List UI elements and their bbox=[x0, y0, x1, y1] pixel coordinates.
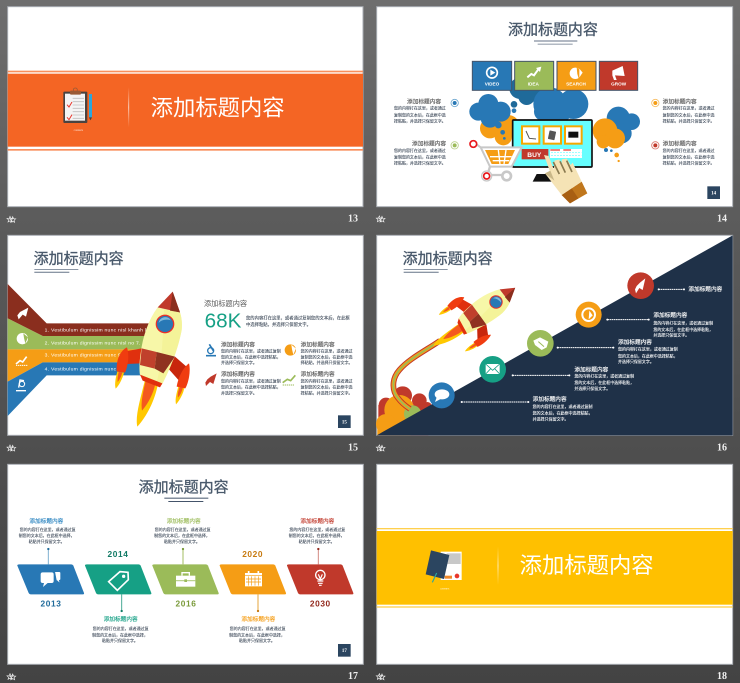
timeline step: 2030 bbox=[287, 564, 353, 608]
text block: 2020 bbox=[229, 615, 286, 643]
text block: step 4: 您的文本后，在此框中选择粘贴， bbox=[653, 326, 713, 332]
timeline step: 2014 bbox=[85, 549, 151, 594]
text block: step 2 bbox=[574, 365, 634, 391]
icon tile: idea: IDEA bbox=[528, 82, 540, 87]
text block: 2020: 您的内容打在这里，或者通过复 bbox=[230, 625, 286, 631]
page number box: 17 bbox=[342, 649, 347, 654]
text block: item 1: 您的内容打在这里，或者通过复制 bbox=[221, 347, 281, 353]
text block: 2013: 制您的文本后，在此框中选择， bbox=[19, 532, 75, 538]
footer: star and page number: 18 bbox=[717, 671, 727, 682]
text block: 2016: 制您的文本后，在此框中选择， bbox=[154, 532, 210, 538]
icon: notebook and card: CONTENTS bbox=[440, 589, 450, 591]
text block: left bottom bbox=[394, 140, 446, 165]
text block: 2020: 粘贴并只保留文字。 bbox=[239, 637, 275, 643]
dark diagonal panel bbox=[377, 235, 733, 435]
text block: headline stat: 添加标题内容 bbox=[204, 299, 247, 308]
ribbon: green item 2: 2. Vestibulum dignissim nunc nisl no 7. bbox=[45, 340, 141, 346]
text block: item 3: 并选择只保留文字。 bbox=[221, 389, 257, 395]
text block: left top bbox=[394, 98, 446, 123]
text block: 2016: 粘贴并只保留文字。 bbox=[164, 538, 200, 544]
timeline step: 2030: 2030 bbox=[310, 598, 331, 608]
text block: item 2: 择粘贴，并选择只保留文字。 bbox=[301, 359, 352, 365]
text block: 2014: 您的内容打在这里，或者通过复 bbox=[93, 625, 149, 631]
text block: step 2: 并选择只保留文字。 bbox=[574, 385, 610, 391]
page number box: 14 bbox=[711, 192, 717, 197]
text block: item 1: 您的文本后，在此框中选择粘贴， bbox=[221, 353, 281, 359]
text block: left bottom: 添加标题内容 bbox=[412, 140, 446, 148]
footer: star and page number bbox=[7, 443, 358, 454]
text block: right bottom: 择粘贴，并选择只保留文字。 bbox=[663, 159, 714, 165]
text block: 2014: 粘贴并只保留文字。 bbox=[102, 637, 138, 643]
text block: item 4: 您的内容打在这里，或者通过 bbox=[301, 377, 352, 383]
footer: star and page number: 13 bbox=[348, 214, 358, 225]
text block: step 4: 添加标题内容 bbox=[653, 311, 688, 319]
text block: item 3 bbox=[221, 370, 281, 395]
marker: orange bbox=[652, 99, 659, 107]
text block: headline stat: 您的内容打在这里，或者通过复制您的文本后，在此框 bbox=[246, 314, 351, 321]
text block: step 4: 您的内容打在这里，或者通过复制 bbox=[653, 320, 713, 326]
text block: item 1: 添加标题内容 bbox=[221, 340, 255, 348]
footer: star and page number: 16 bbox=[717, 443, 727, 454]
text block: item 1 bbox=[221, 340, 281, 365]
text block: item 3: 您的文本后，在此框中选择粘贴， bbox=[221, 383, 281, 389]
icon tile: search bbox=[557, 61, 596, 90]
text block: 2016: 您的内容打在这里，或者通过复 bbox=[155, 526, 211, 532]
arrow: step 1 bbox=[461, 401, 529, 403]
footer: star and page number bbox=[376, 443, 727, 454]
text block: left top: 您的内容打在这里，或者通过 bbox=[394, 105, 446, 111]
text block: step 1: 添加标题内容 bbox=[533, 395, 567, 403]
step circle: pie bbox=[576, 302, 602, 328]
text block: step 1: 并选择只保留文字。 bbox=[533, 415, 569, 421]
timeline step: 2020: 2020 bbox=[242, 549, 263, 559]
text block: item 3: 您的内容打在这里，或者通过复制 bbox=[221, 377, 281, 383]
text block: right top: 择粘贴，并选择只保留文字。 bbox=[663, 117, 714, 123]
text block: right top bbox=[663, 98, 714, 123]
text block: step 1: 您的文本后，在此框中选择粘贴， bbox=[533, 409, 592, 415]
footer: star and page number bbox=[7, 671, 358, 682]
text block: step 3 bbox=[618, 338, 678, 364]
text block: left bottom: 您的内容打在这里，或者通过 bbox=[394, 147, 446, 153]
illustration: monitor: BUY bbox=[527, 152, 542, 159]
text block: 2013: 添加标题内容 bbox=[29, 517, 64, 525]
panel: slide 18 section divider bbox=[376, 464, 733, 682]
text block: item 2: 您的内容打在这里，或者通过 bbox=[301, 347, 352, 353]
text block: step 3: 您的文本后，在此框中选择粘贴， bbox=[618, 352, 678, 358]
icon tile: grow bbox=[599, 61, 638, 90]
step circle: envelope bbox=[479, 356, 506, 383]
text block: right bottom: 复制您的文本后，在此框中选 bbox=[663, 153, 714, 159]
text block: left bottom: 复制您的文本后，在此框中选 bbox=[394, 153, 446, 159]
illustration: pointing hand bbox=[544, 155, 587, 203]
text block: step 1 bbox=[533, 395, 592, 421]
ribbon: orange item 3 bbox=[8, 349, 147, 382]
icon: notebook and card bbox=[426, 550, 462, 591]
connector: 2020 bbox=[257, 594, 259, 612]
connector: 2014 bbox=[120, 594, 123, 612]
arrow: step 5 bbox=[658, 288, 685, 290]
icon: orange pie bbox=[285, 344, 296, 356]
text block: item 2: 添加标题内容 bbox=[301, 340, 335, 348]
text block: 2013: 您的内容打在这里，或者通过复 bbox=[20, 526, 76, 532]
text block: item 2: 复制您的文本后，在此框中选 bbox=[301, 353, 352, 359]
page number box: 15 bbox=[342, 420, 347, 425]
timeline step: 2016 bbox=[152, 564, 219, 608]
step circle: speech bubble bbox=[429, 382, 455, 408]
text block: right bottom: 您的内容打在这里，或者通过 bbox=[663, 147, 714, 153]
text block: item 2 bbox=[301, 340, 352, 365]
footer: star and page number bbox=[7, 214, 358, 225]
text block: step 1: 您的内容打在这里，或者通过复制 bbox=[533, 403, 592, 409]
connector: 2030 bbox=[317, 548, 319, 564]
panel: slide 17 timeline bbox=[7, 464, 363, 682]
text block: step 4: 并选择只保留文字。 bbox=[653, 331, 689, 337]
icon: red rocket bbox=[205, 373, 217, 386]
ribbon: orange item 3: 3. Vestibulum dignissim nunc 9. bbox=[45, 353, 123, 359]
text block: step 3: 您的内容打在这里，或者通过复制 bbox=[618, 346, 678, 352]
illustration: rocket bbox=[421, 261, 525, 370]
step circle: rocket bbox=[627, 272, 654, 299]
panel: slide 15 rocket ribbons bbox=[7, 235, 363, 454]
footer: star and page number bbox=[376, 214, 727, 225]
text block: left bottom: 择粘贴，并选择只保留文字。 bbox=[394, 159, 446, 165]
text block: 2016 bbox=[154, 517, 211, 544]
text block: 2013: 粘贴并只保留文字。 bbox=[29, 538, 65, 544]
text block: step 2: 添加标题内容 bbox=[574, 365, 609, 373]
ribbon: blue item 4: 4. Vestibulum dignissim nunc 11. bbox=[45, 367, 125, 373]
text block: headline stat: 68K bbox=[205, 310, 242, 333]
text block: right bottom bbox=[663, 140, 714, 165]
icon: clipboard and pencil bbox=[63, 88, 92, 132]
text block: 2014: 添加标题内容 bbox=[104, 615, 138, 623]
icon tile: video: VIDEO bbox=[485, 82, 500, 87]
text block: item 1: 并选择只保留文字。 bbox=[221, 359, 257, 365]
text block: 2030: 添加标题内容 bbox=[300, 517, 335, 525]
timeline step: 2013: 2013 bbox=[41, 598, 61, 608]
footer: star and page number bbox=[376, 671, 727, 682]
text block: step 3: 并选择只保留文字。 bbox=[618, 358, 654, 364]
icon tile: search: SEARCH bbox=[566, 82, 586, 87]
ribbon: green item 2 bbox=[8, 318, 147, 349]
text block: left top: 复制您的文本后，在此框中选 bbox=[394, 111, 446, 117]
text block: step 2: 您的文本后，在此框中选择粘贴， bbox=[574, 379, 634, 385]
timeline step: 2014: 2014 bbox=[108, 549, 128, 559]
text block: right bottom: 添加标题内容 bbox=[663, 140, 697, 148]
text block: item 4 bbox=[301, 370, 352, 395]
footer: star and page number: 14 bbox=[717, 214, 727, 225]
heading: 添加标题内容 bbox=[139, 479, 229, 496]
arrow: step 3 bbox=[557, 347, 614, 349]
icon: microscope bbox=[206, 344, 216, 356]
icon: clipboard and pencil: CONTENTS bbox=[74, 130, 84, 132]
text block: step 4 bbox=[653, 311, 713, 337]
text block: item 4: 添加标题内容 bbox=[301, 370, 335, 378]
text block: 2013 bbox=[19, 517, 76, 544]
illustration: monitor bbox=[513, 120, 592, 182]
title: 添加标题内容 bbox=[151, 95, 285, 120]
text block: item 4: 择粘贴，并选择只保留文字。 bbox=[301, 389, 352, 395]
icon tile: video bbox=[472, 61, 512, 90]
text block: right top: 添加标题内容 bbox=[663, 98, 697, 106]
text block: 2016: 添加标题内容 bbox=[167, 517, 201, 525]
title: 添加标题内容 bbox=[520, 553, 654, 578]
timeline step: 2013 bbox=[17, 564, 84, 608]
text block: left top: 添加标题内容 bbox=[407, 98, 441, 106]
text block: 2020: 制您的文本后，在此框中选择， bbox=[229, 631, 285, 637]
text block: headline stat bbox=[204, 299, 351, 333]
step circle: handshake bbox=[527, 330, 554, 357]
text block: 2020: 添加标题内容 bbox=[241, 615, 276, 623]
ribbon: brown item 1: 1. Vestibulum dignissim nunc nisl khanh l bbox=[45, 327, 146, 333]
panel: slide 16 diagonal steps bbox=[376, 235, 733, 454]
text block: step 3: 添加标题内容 bbox=[618, 338, 652, 346]
arrow: step 4 bbox=[606, 319, 650, 321]
ribbon: blue item 4 bbox=[8, 362, 147, 416]
marker: blue bbox=[451, 99, 458, 107]
page number box bbox=[338, 415, 351, 428]
text block: right top: 您的内容打在这里，或者通过 bbox=[663, 105, 714, 111]
illustration: shopping cart bbox=[470, 141, 522, 181]
text block: 2030: 制您的文本后，在此框中选择， bbox=[289, 532, 345, 538]
text block: headline stat: 中选择粘贴，并选择只保留文字。 bbox=[246, 321, 311, 328]
illustration: rocket bbox=[115, 292, 190, 427]
text block: 2030 bbox=[289, 517, 345, 544]
panel: slide 14 online shopping bbox=[376, 7, 733, 225]
text block: step 5: 添加标题内容 bbox=[688, 285, 723, 293]
panel: slide 13 section divider bbox=[7, 7, 363, 225]
text block: 2014 bbox=[92, 615, 149, 643]
ribbon: brown item 1 bbox=[8, 284, 150, 336]
footer: star and page number: 15 bbox=[348, 443, 358, 454]
timeline step: 2016: 2016 bbox=[176, 598, 196, 608]
text block: step 2: 您的内容打在这里，或者通过复制 bbox=[574, 373, 634, 379]
connector: 2016 bbox=[182, 548, 184, 564]
text block: right top: 复制您的文本后，在此框中选 bbox=[663, 111, 714, 117]
arrow: step 2 bbox=[512, 374, 570, 376]
marker: green bbox=[451, 142, 458, 149]
heading: 添加标题内容 bbox=[403, 251, 493, 268]
text block: 2030: 粘贴并只保留文字。 bbox=[299, 538, 335, 544]
icon: green chart bbox=[283, 375, 295, 385]
timeline step: 2020 bbox=[220, 549, 286, 594]
text block: 2014: 制您的文本后，在此框中选择， bbox=[92, 631, 148, 637]
text block: left top: 择粘贴，并选择只保留文字。 bbox=[394, 117, 446, 123]
footer: star and page number: 17 bbox=[348, 671, 358, 682]
illustration: thought clouds bbox=[469, 78, 640, 162]
icon tile: idea bbox=[515, 61, 554, 90]
text block: 2030: 您的内容打在这里，或者通过复 bbox=[289, 526, 345, 532]
page number box bbox=[338, 644, 351, 657]
heading: 添加标题内容 bbox=[508, 22, 598, 39]
text block: item 3: 添加标题内容 bbox=[221, 370, 255, 378]
illustration: launch clouds and trail bbox=[376, 341, 440, 435]
page number box bbox=[707, 186, 720, 199]
text block: item 4: 复制您的文本后，在此框中选 bbox=[301, 383, 352, 389]
marker: red bbox=[652, 142, 659, 149]
icon tile: grow: GROW bbox=[611, 82, 627, 87]
heading: 添加标题内容 bbox=[34, 251, 124, 268]
connector: 2013 bbox=[47, 548, 49, 564]
